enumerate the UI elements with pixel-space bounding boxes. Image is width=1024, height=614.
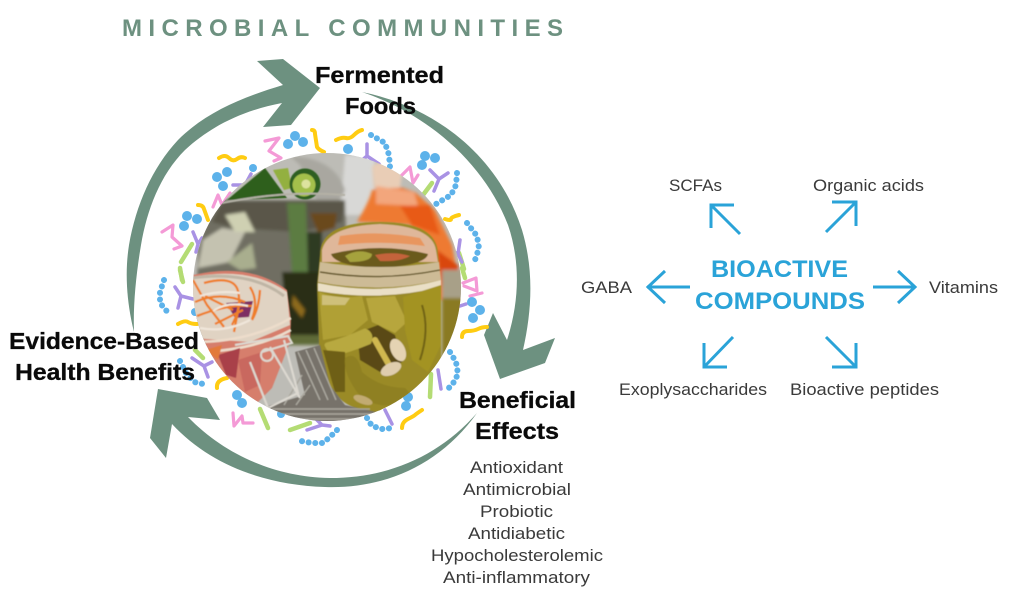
big pickle jar xyxy=(317,222,441,414)
photo background and rear green jar xyxy=(195,155,375,345)
arrow: health benefits to fermented foods xyxy=(127,59,320,332)
list of beneficial effects: Antioxidant xyxy=(470,459,563,477)
arrows: bioactive compounds radial xyxy=(647,202,915,367)
list of beneficial effects: Antidiabetic xyxy=(468,525,565,543)
cycle arrows xyxy=(127,59,555,487)
title: MICROBIAL COMMUNITIES xyxy=(122,15,563,42)
cloth xyxy=(266,344,376,421)
compound labels: Exoplysaccharides xyxy=(619,381,767,399)
list of beneficial effects: Probiotic xyxy=(480,503,553,521)
list of beneficial effects: Antimicrobial xyxy=(463,481,571,499)
photo: fermented vegetables in jars xyxy=(190,150,465,425)
heading: bioactive compounds xyxy=(695,256,865,315)
label: Fermented Foods: Fermented xyxy=(315,62,444,88)
label: Evidence-Based Health Benefits: Evidence-Based xyxy=(9,328,199,354)
compound labels xyxy=(581,177,998,399)
compound labels: SCFAs xyxy=(669,177,722,195)
label: Evidence-Based Health Benefits: Health Benefits xyxy=(15,359,195,385)
label: Beneficial Effects: Effects xyxy=(475,418,559,444)
purple Y shapes xyxy=(175,144,466,430)
yellow chains xyxy=(178,130,487,428)
blue chains xyxy=(160,135,479,443)
green bars xyxy=(180,183,465,430)
compound labels: Vitamins xyxy=(929,279,998,297)
heading: bioactive compounds: BIOACTIVE xyxy=(711,256,848,283)
list of beneficial effects xyxy=(431,459,603,587)
label: Evidence-Based Health Benefits xyxy=(9,328,199,385)
left jar with red cabbage and carrots xyxy=(192,271,300,408)
compound labels: GABA xyxy=(581,279,632,297)
molecule ring xyxy=(160,130,487,443)
list of beneficial effects: Anti-inflammatory xyxy=(443,569,591,587)
label: Fermented Foods xyxy=(315,62,444,119)
metal clasp wires xyxy=(235,336,300,408)
pink glyphs xyxy=(162,138,482,426)
compound labels: Bioactive peptides xyxy=(790,381,939,399)
orange jar xyxy=(356,162,461,358)
blue dot clusters xyxy=(179,131,485,418)
list of beneficial effects: Hypocholesterolemic xyxy=(431,547,603,565)
compound labels: Organic acids xyxy=(813,177,924,195)
arrow: fermented foods to beneficial effects xyxy=(362,92,555,379)
label: Fermented Foods: Foods xyxy=(345,93,416,119)
label: Beneficial Effects xyxy=(459,387,576,444)
heading: bioactive compounds: COMPOUNDS xyxy=(695,288,865,315)
green leaves and cucumber xyxy=(222,168,345,203)
arrow: beneficial effects to health benefits xyxy=(150,389,477,487)
label: Beneficial Effects: Beneficial xyxy=(459,387,576,413)
